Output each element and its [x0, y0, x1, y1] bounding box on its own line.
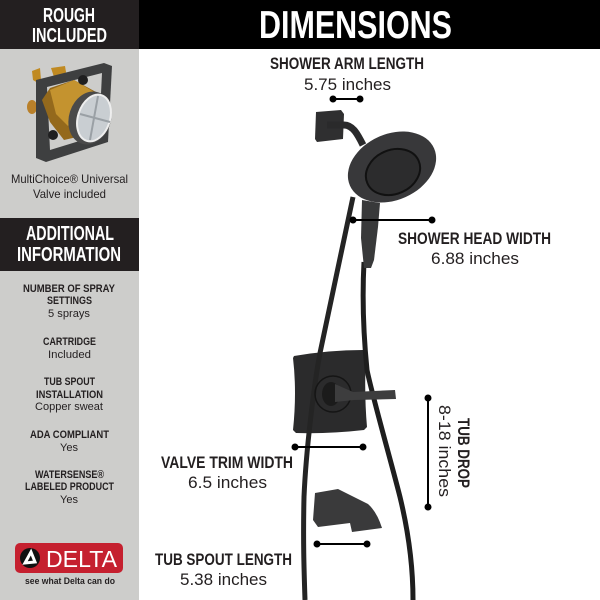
heading band: rough included — [0, 0, 139, 49]
label: tub drop: TUB DROP — [454, 418, 473, 488]
panel: sidebar — [0, 0, 139, 600]
label: shower head width — [398, 229, 551, 268]
label: shower arm length: SHOWER ARM LENGTH — [270, 54, 424, 73]
shower arm — [327, 125, 363, 145]
heading band: dimensions — [139, 0, 600, 49]
heading band: dimensions: DIMENSIONS — [259, 4, 452, 47]
valve trim — [293, 350, 367, 433]
text: valve caption: MultiChoice® Universal — [11, 172, 128, 186]
label: valve trim width: 6.5 inches — [188, 473, 267, 492]
spec: cartridge — [43, 336, 96, 361]
dimension line: tub drop — [426, 396, 430, 510]
label: tub spout length — [155, 550, 292, 589]
dimension line: tub spout — [314, 542, 370, 546]
text: valve caption — [11, 172, 128, 201]
spec: cartridge: CARTRIDGE — [43, 336, 96, 348]
spec: ada compliant: ADA COMPLIANT — [30, 429, 109, 441]
label: tub drop: 8-18 inches — [435, 405, 454, 497]
logo: delta — [15, 543, 123, 587]
heading band: rough included: ROUGH — [43, 5, 95, 27]
heading band: additional information: ADDITIONAL — [26, 223, 114, 245]
label: valve trim width: VALVE TRIM WIDTH — [161, 453, 293, 472]
label: shower arm length: 5.75 inches — [304, 75, 391, 94]
icon: rough-in valve — [27, 63, 118, 162]
dimension line: shower head — [350, 218, 434, 222]
spec: cartridge: Included — [48, 349, 91, 361]
label: tub spout length: 5.38 inches — [180, 570, 267, 589]
text: valve caption: Valve included — [33, 187, 106, 201]
spec: watersense — [25, 469, 114, 506]
label: shower head width: 6.88 inches — [431, 249, 519, 268]
heading band: additional information — [0, 218, 139, 271]
label: valve trim width — [161, 453, 293, 492]
spec: spray settings — [23, 283, 116, 320]
label: shower arm length — [270, 54, 424, 94]
spec: spray settings: 5 sprays — [48, 308, 91, 320]
logo: delta: DELTA — [46, 546, 118, 572]
tub spout — [313, 489, 382, 532]
spec: spray settings: SETTINGS — [47, 295, 92, 307]
label: tub drop — [435, 405, 473, 497]
spec: tub spout installation: Copper sweat — [35, 401, 103, 413]
hose: right — [363, 262, 413, 600]
spec: tub spout installation: TUB SPOUT — [44, 376, 95, 388]
heading band: additional information: INFORMATION — [17, 244, 121, 266]
spec: watersense: WATERSENSE® — [35, 469, 104, 481]
heading band: rough included: INCLUDED — [32, 25, 107, 47]
shower head — [337, 118, 447, 268]
valve lever — [315, 376, 396, 412]
dimension line: valve trim — [292, 444, 366, 450]
spec: watersense: LABELED PRODUCT — [25, 481, 114, 493]
dimension line: shower arm — [330, 96, 362, 102]
spec: watersense: Yes — [60, 494, 79, 506]
spec: tub spout installation — [35, 376, 103, 413]
shower arm mount — [315, 110, 344, 142]
hose: left — [304, 197, 353, 600]
spec: ada compliant: Yes — [60, 442, 79, 454]
logo: delta: see what Delta can do — [25, 576, 115, 587]
label: tub spout length: TUB SPOUT LENGTH — [155, 550, 292, 569]
spec: ada compliant — [30, 429, 109, 454]
spec: tub spout installation: INSTALLATION — [36, 389, 103, 401]
spec: spray settings: NUMBER OF SPRAY — [23, 283, 116, 295]
label: shower head width: SHOWER HEAD WIDTH — [398, 229, 551, 248]
